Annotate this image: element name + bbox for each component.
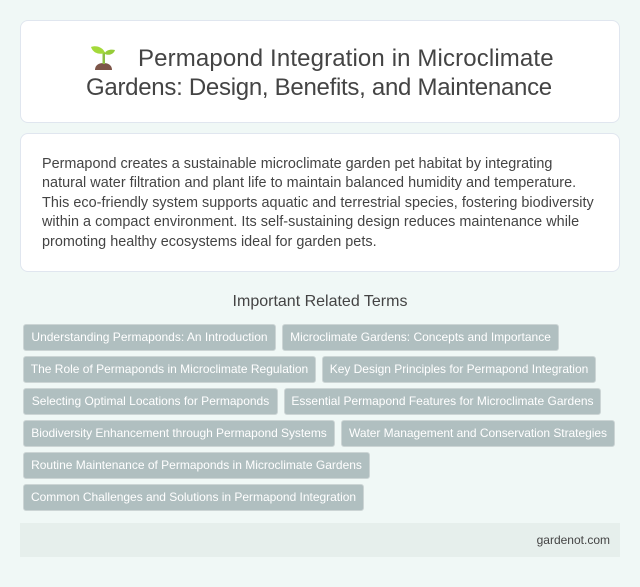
tag [23,452,370,479]
tag: The Role of Permaponds in Microclimate Regulation [31,362,308,376]
description text: natural water filtration and plant life to maintain balanced humidity and temperature. [42,175,576,191]
description text: This eco-friendly system supports aquatic and terrestrial species, fostering biodiversity [42,195,594,211]
title card [20,20,620,123]
title [86,45,554,101]
tag [284,388,601,415]
related terms heading: Important Related Terms [233,293,407,310]
description text: Permapond creates a sustainable microclimate garden pet habitat by integrating [42,156,552,172]
related term tags [23,324,615,511]
tag: Key Design Principles for Permapond Integration [330,362,588,376]
description card [20,133,620,272]
description text: promoting healthy ecosystems ideal for garden pets. [42,234,377,250]
tag: Routine Maintenance of Permaponds in Microclimate Gardens [31,458,362,472]
tag [23,420,335,447]
tag: Essential Permapond Features for Microclimate Gardens [291,394,594,408]
description text [42,156,594,250]
description text: within a compact environment. Its self-sustaining design reduces maintenance while [42,214,579,230]
tag [322,356,596,383]
tag: Water Management and Conservation Strategies [349,426,607,440]
tag: Selecting Optimal Locations for Permaponds [32,394,269,408]
tag: Common Challenges and Solutions in Permapond Integration [31,490,356,504]
tag [282,324,559,351]
tag [23,484,364,511]
tag: Biodiversity Enhancement through Permapond Systems [31,426,327,440]
tag [23,356,316,383]
tag [23,324,276,351]
tag [341,420,615,447]
icon: seedling [91,46,115,70]
title: Gardens: Design, Benefits, and Maintenance [86,74,552,101]
tag: Microclimate Gardens: Concepts and Importance [290,330,551,344]
footer bar [20,523,620,557]
tag [23,388,278,415]
footer source text: gardenot.com [537,533,610,547]
tag: Understanding Permaponds: An Introduction [31,330,268,344]
title: Permapond Integration in Microclimate [138,45,554,72]
